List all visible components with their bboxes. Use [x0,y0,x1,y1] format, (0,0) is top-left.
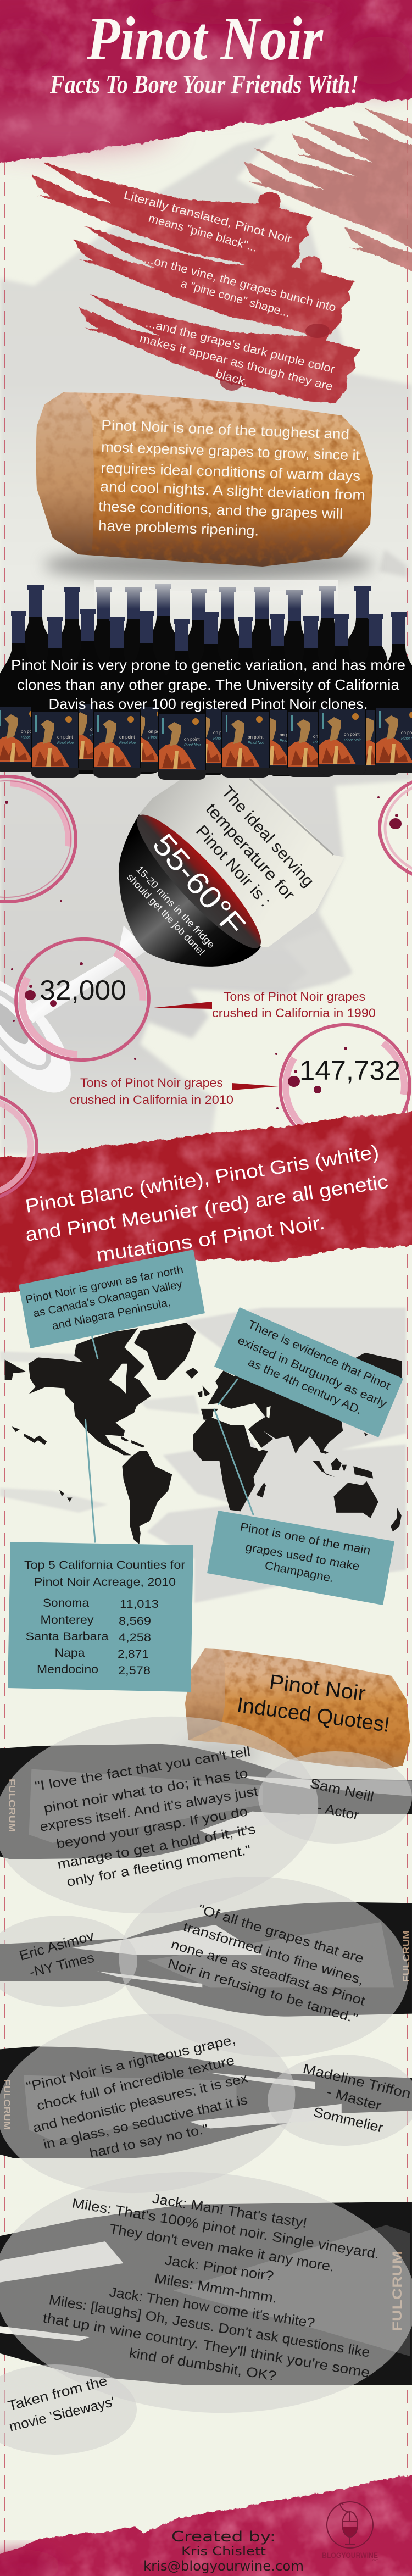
wine stain ring: 1990 figure [10,932,155,1067]
cork end cap [36,392,94,554]
icon: cork body [185,1648,410,1769]
serving temperature heading [192,783,318,911]
figure: 2010 tons: 147,732 [299,1055,400,1086]
stroke blots [220,324,330,391]
quote: Sam Neill: "I love the fact that you can't tell [34,1744,252,1794]
wine glass [0,772,344,1109]
horizontal bottle 2 [0,1902,412,2017]
fact: pine black: Literally translated, Pinot Noir [123,189,293,246]
quote: Madeline Triffon: in a glass, so seductive that it is [42,2092,249,2152]
wine stain ring, upper right [380,774,412,882]
title: Pinot Noir [86,5,324,73]
header band [0,0,412,164]
brand label: Fulcrum: FULCRUM [401,1930,411,1982]
quote: Sideways dialogue: that up in wine country. They'll think you're some [42,2310,371,2380]
world map [5,1323,402,1544]
map background wash [0,1308,406,1603]
logo: Blog Your Wine: .com [371,2559,378,2562]
brand label: Fulcrum [2,1779,411,2331]
pale brush strokes, upper right [243,108,412,323]
caption: 1990 tons: Tons of Pinot Noir grapes [224,990,365,1003]
attribution: Madeline Triffon: Madeline Triffon [302,2061,412,2102]
credits: Kris Chislett [181,2545,266,2558]
mutations text [24,1141,389,1266]
quote: Madeline Triffon [25,2032,249,2161]
temperature value: 55-60°F [146,827,252,942]
growing conditions text: most expensive grapes to grow, since it [101,438,360,464]
callout: Canada: and Niagara Peninsula, [51,1296,172,1333]
heading text: Induced Quotes! [236,1694,391,1737]
county names: Mendocino [37,1663,98,1676]
table heading: Top 5 California Counties for [24,1558,185,1572]
callout: Canada: Pinot Noir is grown as far north [25,1264,185,1306]
glass foot [0,962,88,1109]
icon: cork body [36,392,373,567]
caption: 1990 tons [212,990,376,1020]
back row of wine bottles [10,580,388,776]
table heading [24,1558,185,1589]
quote: Madeline Triffon: hard to say no to." [88,2122,209,2161]
callout: Burgundy [214,1307,403,1437]
logo: Blog Your Wine [322,2502,378,2562]
attribution: Sam Neill [309,1776,375,1823]
quote: Madeline Triffon: chock full of incredible texture [35,2053,236,2114]
quote: Sideways dialogue: They don't even make it any more. [108,2221,336,2275]
quote: Sideways dialogue: Miles: Mmm-hmm. [153,2270,279,2306]
quote: Sideways dialogue: Miles: [laughs] Oh, Jesus. Don't ask questions like [48,2292,371,2361]
glass bowl [139,772,344,947]
attribution: Madeline Triffon: Sommelier [312,2105,385,2136]
red brush strokes [31,161,360,403]
callout: Burgundy: as the 4th century AD. [246,1356,364,1417]
county names: Santa Barbara [25,1630,109,1643]
growing conditions text: requires ideal conditions of warm days [101,459,361,484]
growing conditions text [98,417,366,539]
attribution: Eric Asimov [18,1928,96,1980]
fact: dark purple colour [138,317,336,393]
cork shadow [44,548,374,581]
horizontal bottle 4 [0,2202,412,2385]
serving temperature heading: The ideal serving [218,783,318,891]
quote: Sideways dialogue [42,2191,381,2384]
quote: Sideways dialogue: Jack: Then how come it's white? [108,2284,316,2331]
horizontal bottle 1 [0,1744,412,1859]
clones text: Davis has over 100 registered Pinot Noir clones. [48,696,368,712]
county names: Monterey [41,1614,94,1626]
credits: kris@blogyourwine.com [143,2558,304,2574]
arrow: 1990 pointer [154,1002,212,1009]
quote: Sam Neill: manage to get a hold of it, it's [56,1822,257,1872]
growing conditions text: have problems ripening. [98,517,259,539]
front row of wine bottles [0,609,412,780]
logo: Blog Your Wine: BLOGYOURWINE [322,2551,378,2560]
mutations text: and Pinot Meunier (red) are all genetic [24,1171,389,1246]
clones text: clones than any other grape. The University of California [17,676,400,693]
acreage values: 2,871 [118,1648,149,1661]
acreage values: 11,013 [120,1598,159,1611]
callout: Burgundy: There is evidence that Pinot [246,1318,392,1392]
fact: pine cone shape: a "pine cone" shape... [180,277,291,320]
acreage values [118,1598,159,1677]
cork shadow, quotes heading [181,1739,258,1767]
caption: 2010 tons: Tons of Pinot Noir grapes [80,1076,223,1090]
callout: Champagne: grapes used to make [244,1541,360,1573]
quote bubbles [0,1703,412,2455]
fact: dark purple colour: ...and the grape's dark purple color [144,317,336,376]
serving temperature heading: temperature for [202,800,298,904]
attribution: Sam Neill: Sam Neill [309,1776,375,1805]
quote: Madeline Triffon: and hedonistic pleasures; it is sex [31,2070,249,2136]
clones text [11,657,405,712]
figure: 1990 tons: 32,000 [40,975,126,1006]
panel: cork heading [185,1648,410,1769]
wine in bowl [119,814,261,967]
credits: Created by: [171,2529,276,2545]
caption: 2010 tons: crushed in California in 2010 [70,1093,233,1107]
mutations band [0,1112,412,1292]
credits [143,2529,304,2574]
fact: dark purple colour: makes it appear as though they are [138,332,334,393]
cork end cap [185,1648,225,1740]
quote: Sam Neill: only for a fleeting moment." [65,1842,252,1890]
quote: Eric Asimov: none are as steadfast as Pinot [169,1937,367,2009]
table: top 5 counties [8,1542,193,1692]
fact: pine black [123,189,293,254]
background grey watercolour wash [0,134,412,1154]
attribution: Eric Asimov: -NY Times [28,1950,96,1980]
quote: Eric Asimov: "Of all the grapes that are [196,1902,365,1967]
subtitle: Facts To Bore Your Friends With! [49,70,359,99]
quote: Eric Asimov [166,1902,367,2027]
fridge tip: 15-20 mins in the fridge [134,864,217,950]
mutations text: Pinot Blanc (white), Pinot Gris (white) [24,1141,381,1217]
clones text: Pinot Noir is very prone to genetic variation, and has more [11,657,405,673]
quote: Sideways dialogue: Jack: Man! That's tasty! [151,2191,308,2231]
county names: Sonoma [43,1597,89,1609]
quote: Sam Neill [34,1744,259,1890]
attribution: Sam Neill: - Actor [316,1800,360,1823]
attribution: Sideways: Taken from the [6,2373,109,2414]
fridge tip: should get the job done! [125,871,207,958]
county names [25,1597,109,1676]
acreage values: 4,258 [119,1631,151,1644]
quote: Sideways dialogue: kind of dumbshit, OK? [128,2345,277,2384]
attribution: Eric Asimov: Eric Asimov [18,1928,96,1964]
growing conditions text: these conditions, and the grapes will [98,498,343,522]
callout: Canada [19,1250,205,1348]
county names: Napa [55,1647,85,1659]
growing conditions text: and cool nights. A slight deviation from [100,478,366,503]
growing conditions text: Pinot Noir is one of the toughest and [101,417,350,442]
attribution: Madeline Triffon: - Master [325,2084,383,2114]
acreage values: 2,578 [118,1664,151,1677]
quote: Sam Neill: pinot noir what to do; it has to [42,1766,249,1816]
footer band [0,2475,412,2576]
callout: Burgundy: existed in Burgundy as early [236,1334,389,1411]
acreage values: 8,569 [119,1615,151,1628]
brand label: Fulcrum: FULCRUM [7,1779,17,1832]
caption: 1990 tons: crushed in California in 1990 [212,1006,376,1020]
wine stain ring, lower left [0,1092,37,1202]
panel: cork with growing conditions text [36,392,373,567]
quote: Sideways dialogue: Miles: That's 100% pinot noir. Single vineyard. [71,2195,381,2262]
table heading: Pinot Noir Acreage, 2010 [34,1575,176,1589]
callout: Canada: as Canada's Okanagan Valley [32,1278,183,1320]
heading text: Pinot Noir [268,1670,367,1706]
horizontal bottle 3 [0,2046,412,2158]
wine splatter drops [5,796,402,1109]
wine stain ring: 2010 figure [274,1018,412,1154]
attribution: Sideways [6,2373,116,2435]
quote: Eric Asimov: transformed into fine wines, [181,1919,365,1988]
fact: dark purple colour: black. [214,368,250,389]
quote: Sideways dialogue: Jack: Pinot noir? [164,2252,275,2284]
quote: Madeline Triffon: "Pinot Noir is a righteous grape, [25,2032,237,2095]
mutations text: mutations of Pinot Noir. [95,1212,326,1266]
fact: pine black: means "pine black"... [147,212,259,254]
serving temperature heading: Pinot Noir is : [192,822,274,911]
arrow: 2010 pointer [232,1083,279,1090]
callout: Champagne: Champagne. [264,1559,335,1585]
quote: Sam Neill: beyond your grasp. If you do [55,1804,249,1852]
callout: Champagne [207,1511,394,1605]
attribution: Madeline Triffon [302,2061,412,2136]
heading text [236,1670,391,1737]
brand label: Fulcrum: FULCRUM [390,2251,405,2331]
callout connector lines [85,1336,254,1543]
callout: Champagne: Pinot is one of the main [239,1520,371,1557]
quote: Eric Asimov: Noir in refusing to be tamed." [166,1956,359,2027]
wine stain ring, upper left [0,776,76,902]
caption: 2010 tons [70,1076,233,1107]
quote: Sam Neill: express itself. And it's always just [39,1784,259,1835]
attribution: Sideways: movie 'Sideways' [8,2394,116,2435]
brand label: Fulcrum: FULCRUM [2,2079,12,2130]
glass stem [22,925,147,1023]
fact: pine cone shape: ...on the vine, the grapes bunch into [143,253,337,314]
